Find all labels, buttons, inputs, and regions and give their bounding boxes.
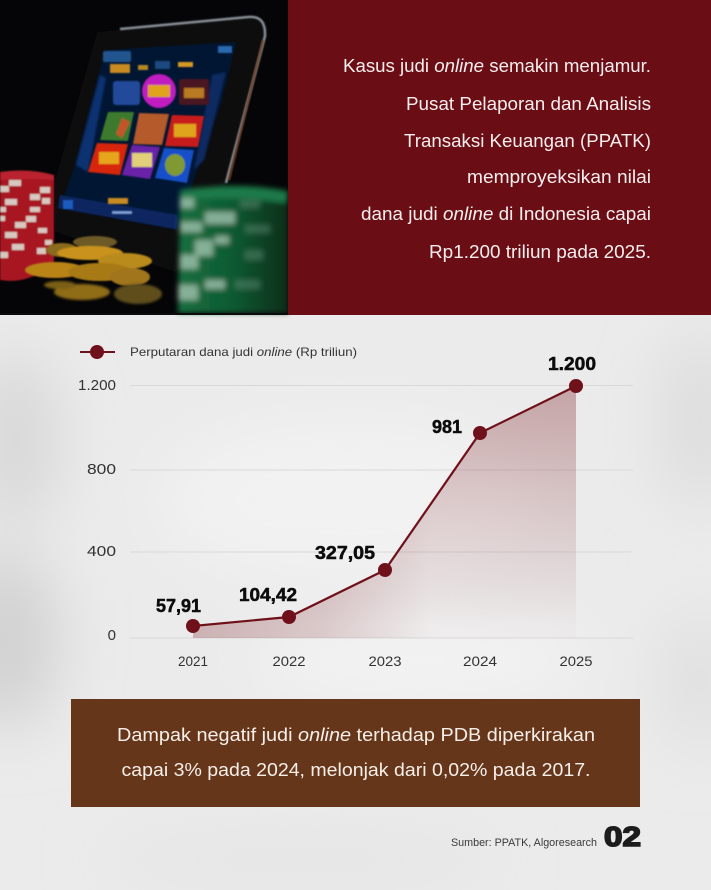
tablet edge — [120, 17, 265, 183]
intro text: Rp1.200 triliun pada 2025. — [429, 242, 651, 262]
data labels: 1.200 — [548, 354, 596, 374]
y axis labels: 800 — [87, 461, 116, 478]
data points — [186, 379, 583, 633]
x axis labels — [178, 653, 593, 669]
photo: tablet, chips and coins — [0, 0, 288, 315]
tablet body — [55, 16, 265, 272]
intro text: Transaksi Keuangan (PPATK) — [404, 131, 651, 151]
panel: introduction — [288, 0, 711, 315]
page number: 02 — [604, 821, 641, 852]
x axis labels: 2023 — [368, 653, 402, 669]
data labels: 104,42 — [239, 585, 297, 605]
x axis labels: 2021 — [178, 653, 208, 669]
gold coins — [25, 236, 152, 286]
y axis labels: 1.200 — [78, 377, 116, 394]
source note: Sumber: PPATK, Algoresearch — [451, 837, 597, 849]
x axis labels: 2025 — [560, 653, 593, 669]
intro text: Pusat Pelaporan dan Analisis — [406, 94, 651, 114]
line chart — [78, 345, 633, 669]
y axis labels: 400 — [87, 543, 116, 560]
data labels: 57,91 — [156, 596, 201, 616]
red chips stack — [0, 171, 54, 281]
x axis labels: 2022 — [272, 653, 306, 669]
area under line — [193, 386, 576, 638]
data labels — [156, 354, 596, 616]
y axis labels: 0 — [108, 627, 116, 644]
green chips stack — [178, 185, 288, 313]
legend: Perputaran dana judi online (Rp triliun) — [130, 345, 357, 359]
tablet screen — [60, 42, 236, 230]
smoky paper background — [0, 353, 711, 736]
x axis labels: 2024 — [463, 653, 497, 669]
intro text: dana judi online di Indonesia capai — [361, 204, 651, 224]
callout: GDP impact: capai 3% pada 2024, melonjak dari 0,02% pada 2017. — [122, 760, 590, 780]
game tiles — [63, 46, 232, 214]
data labels: 327,05 — [315, 543, 375, 563]
callout: GDP impact — [71, 699, 640, 807]
y axis labels — [78, 377, 116, 644]
data labels: 981 — [432, 417, 462, 437]
intro text: memproyeksikan nilai — [467, 167, 651, 187]
intro text — [343, 56, 651, 262]
data line — [193, 386, 576, 626]
callout: GDP impact: Dampak negatif judi online terhadap PDB diperkirakan — [117, 725, 595, 745]
intro text: Kasus judi online semakin menjamur. — [343, 56, 651, 76]
